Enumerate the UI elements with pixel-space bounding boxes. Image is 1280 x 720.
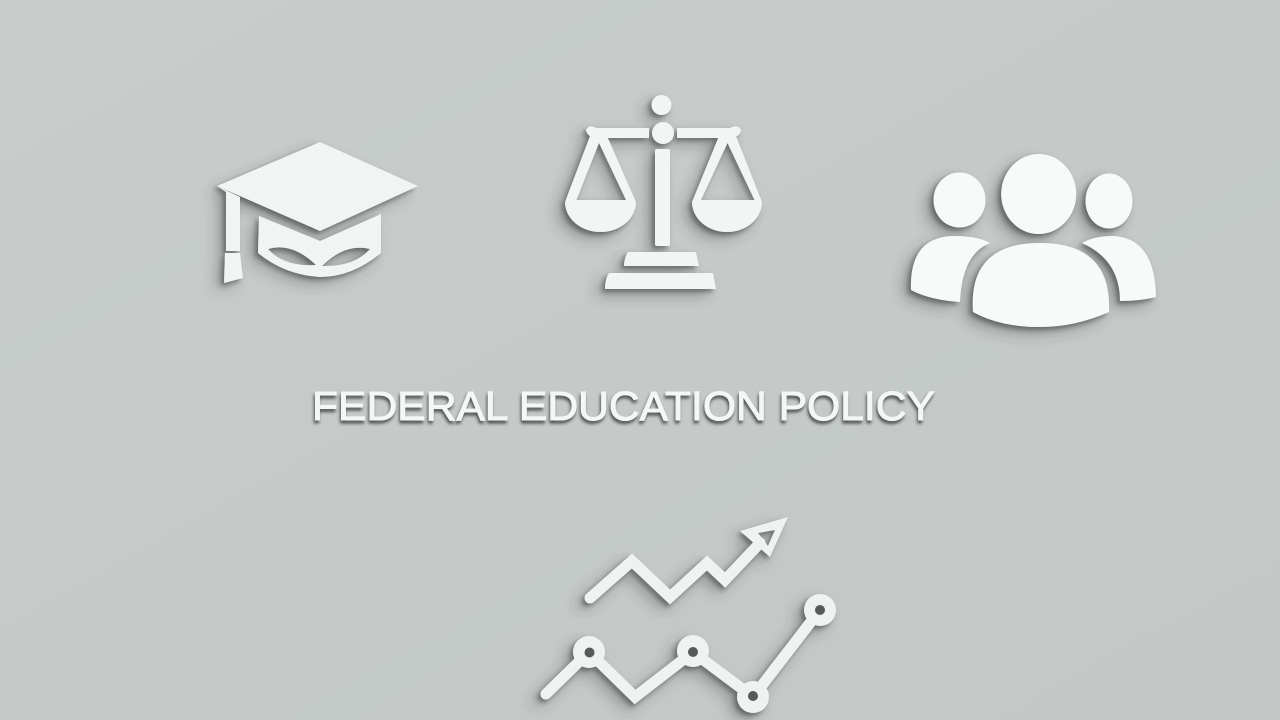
right head [1086, 174, 1132, 228]
scale post [655, 149, 670, 246]
icon: line chart with nodes [546, 594, 836, 713]
scale top ball [652, 95, 672, 115]
icon: group of people [911, 154, 1156, 327]
chart node 3 [737, 681, 769, 713]
cap base [258, 214, 381, 277]
chart node 4 [804, 594, 836, 626]
icon: rising arrow line [590, 517, 788, 598]
icon: graduation cap [217, 142, 418, 283]
scale upper base [624, 252, 699, 266]
cap strap [217, 186, 240, 251]
scale left beam [586, 126, 649, 138]
scale lower base [605, 273, 716, 289]
chart line [546, 610, 820, 697]
title: FEDERAL EDUCATION POLICY [312, 383, 935, 429]
cap board [217, 142, 418, 231]
icon: balance scale [565, 95, 762, 289]
scale left pan [565, 136, 636, 232]
right body [1082, 236, 1156, 301]
arrow head [740, 517, 788, 557]
chart node holes [584, 605, 825, 701]
scale pivot ball [652, 122, 674, 144]
chart node 2 [677, 635, 709, 667]
cap tassel [224, 253, 243, 283]
left head [934, 172, 986, 228]
center body [973, 243, 1109, 327]
center head [1001, 154, 1076, 234]
scale right pan [692, 136, 762, 232]
arrow zigzag line [590, 543, 760, 598]
chart node 1 [573, 636, 605, 668]
left body [911, 236, 990, 302]
scale right beam [677, 126, 741, 138]
